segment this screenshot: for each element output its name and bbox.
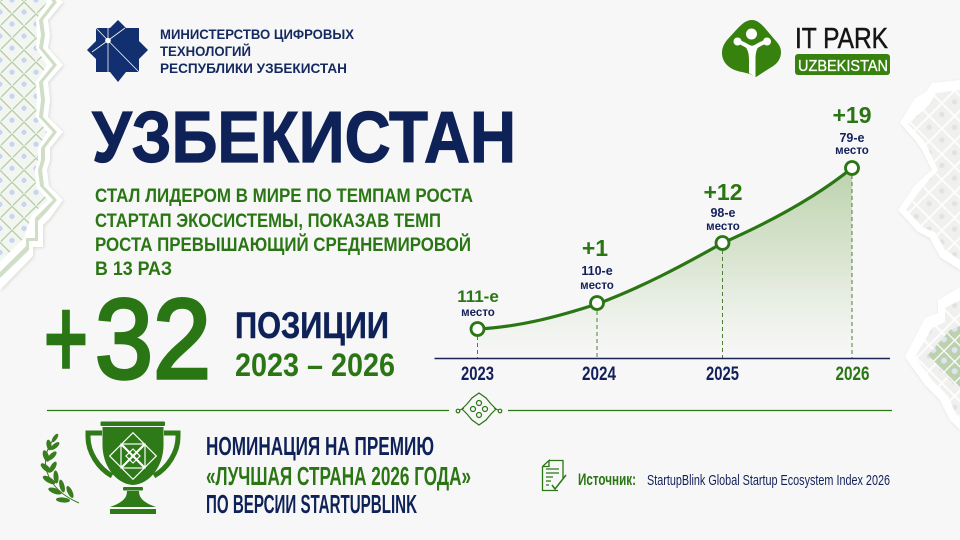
subtitle text: СТАЛ ЛИДЕРОМ В МИРЕ ПО ТЕМПАМ РОСТА (95, 185, 473, 207)
nomination text (206, 431, 471, 519)
point labels 2023: место (461, 307, 495, 319)
point labels 2025 (703, 179, 743, 233)
nomination text: «ЛУЧШАЯ СТРАНА 2026 ГОДА» (206, 461, 471, 491)
IT Park wordmark: UZBEKISTAN (798, 58, 888, 75)
ornament: right upper white (898, 80, 960, 270)
divider ornament (456, 393, 502, 425)
point labels 2025: 98-е (710, 206, 736, 220)
ministry name text: МИНИСТЕРСТВО ЦИФРОВЫХ (160, 27, 354, 42)
point labels 2024 (580, 235, 614, 292)
subtitle text: СТАРТАП ЭКОСИСТЕМЫ, ПОКАЗАВ ТЕМП (95, 210, 441, 232)
logo: IT Park leaf (722, 20, 781, 77)
point labels 2026: 79-е (839, 131, 865, 145)
ministry name text: РЕСПУБЛИКИ УЗБЕКИСТАН (160, 61, 347, 76)
growth line chart (434, 102, 890, 385)
point labels 2023: 111-е (457, 287, 499, 306)
point labels 2025: +12 (703, 179, 743, 205)
point labels 2024: +1 (582, 235, 608, 261)
point labels 2024: место (580, 280, 614, 292)
point labels 2026 (832, 102, 872, 157)
ornament: left border (0, 0, 63, 290)
nomination text: НОМИНАЦИЯ НА ПРЕМИЮ (206, 431, 434, 461)
year axis labels: 2025 (706, 364, 739, 385)
big number +32: 32 (95, 276, 211, 402)
nomination text: ПО ВЕРСИИ STARTUPBLINK (206, 489, 417, 519)
trophy emblem (110, 433, 156, 479)
big number +32: + (44, 275, 88, 401)
point labels 2024: 110-е (581, 264, 613, 278)
point labels 2023 (457, 287, 499, 319)
source text (578, 471, 890, 489)
point labels 2025: место (706, 221, 740, 233)
logo: ministry star (87, 20, 148, 82)
subtitle text: В 13 РАЗ (95, 258, 172, 280)
IT Park wordmark (795, 23, 890, 75)
point labels 2026: место (835, 145, 869, 157)
icon: trophy (88, 422, 178, 514)
subtitle text (95, 185, 473, 280)
year axis labels: 2026 (836, 364, 870, 385)
positions label (235, 305, 395, 383)
ministry name text: ТЕХНОЛОГИЙ (160, 44, 251, 59)
icon: laurel branch (39, 433, 79, 503)
point labels 2026: +19 (832, 102, 872, 128)
year axis labels (461, 364, 870, 385)
big number +32 (44, 275, 211, 402)
IT Park wordmark: IT PARK (795, 23, 889, 55)
ornament: right lower green (905, 287, 960, 430)
ministry name text (160, 27, 354, 76)
subtitle text: РОСТА ПРЕВЫШАЮЩИЙ СРЕДНЕМИРОВОЙ (95, 232, 471, 256)
year axis labels: 2024 (582, 364, 616, 385)
positions label: ПОЗИЦИИ (235, 305, 389, 346)
icon: source document (542, 460, 566, 490)
source text: Источник: (578, 471, 636, 489)
positions label: 2023 – 2026 (235, 347, 395, 383)
year axis labels: 2023 (461, 364, 494, 385)
title: УЗБЕКИСТАН (92, 98, 516, 178)
